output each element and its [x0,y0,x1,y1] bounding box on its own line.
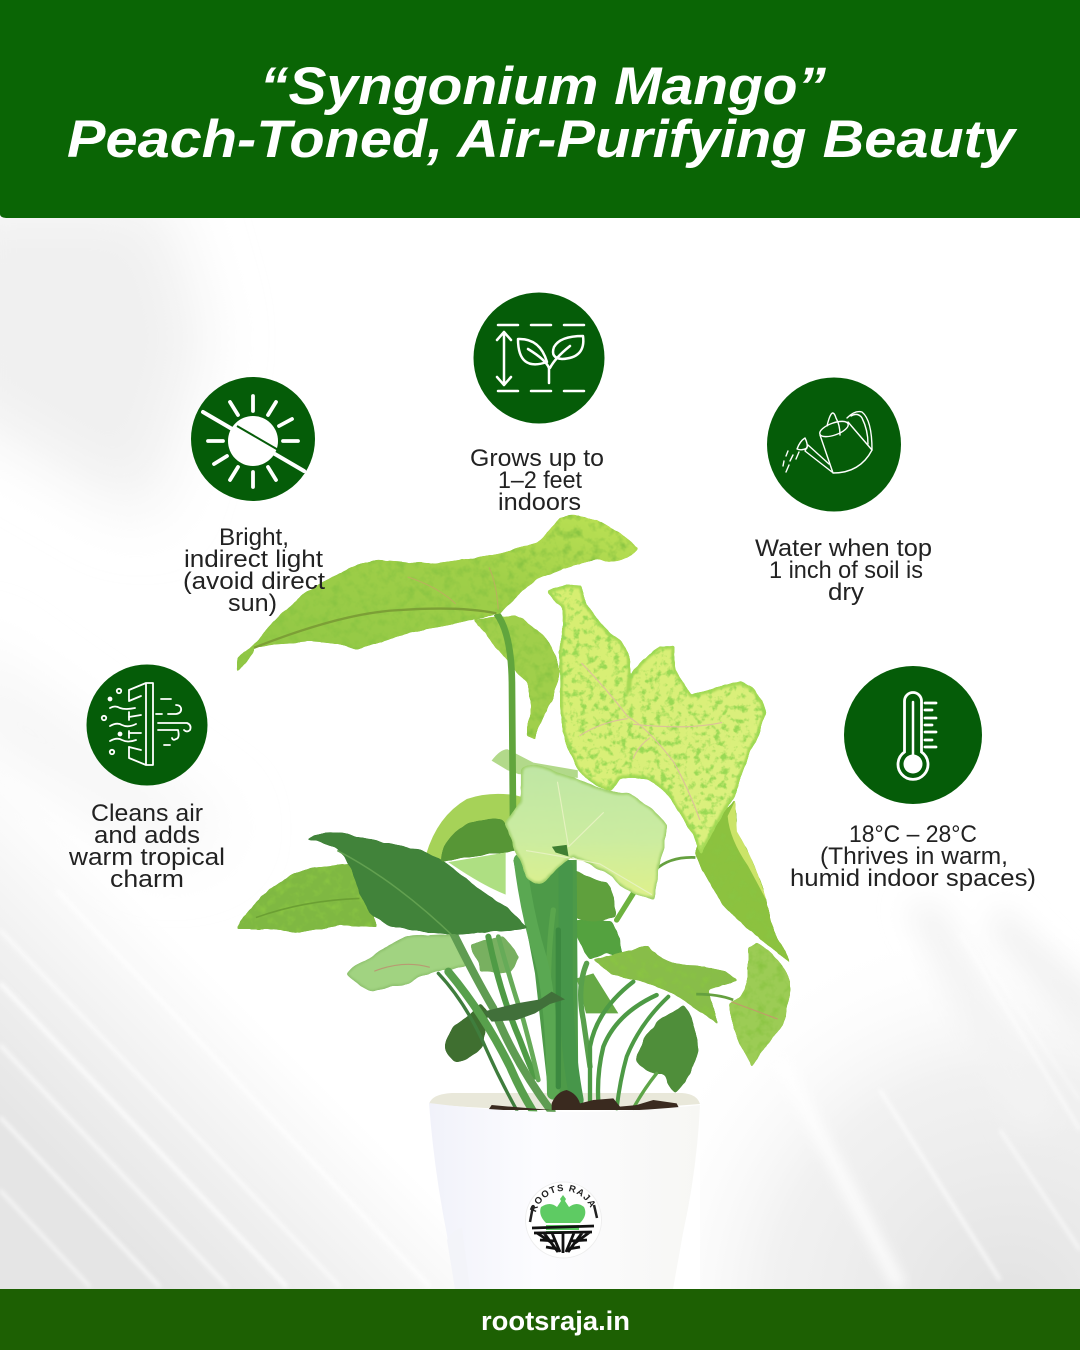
text: temperature [790,821,1036,892]
pot back rim [429,1093,700,1110]
pale low leaf vein [374,964,430,971]
icon: air filter [86,664,208,786]
text: light [183,524,325,617]
stem leaf [483,992,565,1022]
soil [488,1090,680,1110]
text: light: (avoid direct [183,568,325,595]
text: air: and adds [94,822,200,849]
lower right leaf [730,942,791,1067]
callout: temperature [790,666,1036,892]
stem mass [513,860,578,1093]
top leaf veins [254,609,496,648]
icon: plant height [474,292,604,424]
tall stem [496,613,513,828]
text: height: indoors [498,489,581,516]
icon: sun with slash [191,377,315,501]
pale inner piece [448,853,506,895]
lower shaded leaves [520,867,616,927]
dark fold leaf [441,819,517,862]
pale leaf veins [526,782,652,895]
back left leaf [237,864,376,933]
footer url: rootsraja.in [481,1306,630,1336]
crown [540,1195,585,1233]
soft leaf behind stems [470,937,520,973]
text: height [470,445,604,516]
text: light: sun) [228,590,277,617]
stems [438,860,668,1112]
trailing leaf yellow edge [728,801,766,900]
pale front leaf [506,765,666,898]
plant illustration: Syngonium Mango [237,515,795,1112]
bright mottled leaf [549,586,765,853]
pale leaf joint [552,845,569,856]
text: temperature: 18°C – 28°C [849,821,977,848]
text: light: indirect light [184,546,323,573]
text: water: Water when top [755,535,932,562]
connecting stems [656,857,733,1000]
icon: watering can [767,378,901,512]
right trailing leaf [694,799,795,977]
small top pale leaf [492,749,578,778]
callout: height [470,292,604,516]
dark big leaf [306,832,530,935]
text: temperature: (Thrives in warm, [820,843,1008,870]
text: air [68,800,225,893]
text: water [755,535,932,606]
back left leaf vein [256,898,360,918]
dark low leaf right [636,1004,697,1093]
roots [532,1226,594,1253]
text: water: 1 inch of soil is [769,557,923,584]
text: height: Grows up to [470,445,604,472]
logo text: ROOTS RAJA [530,1184,595,1212]
top big leaf [237,515,638,671]
text: water: dry [828,579,864,606]
title [67,57,1018,169]
pot [429,1103,700,1289]
footer band [0,1289,1080,1350]
lower lobe of top leaf [474,615,559,740]
text: air: Cleans air [91,800,203,827]
lower right leaf vein [731,1002,778,1019]
callout: light [183,377,325,617]
text: light: Bright, [219,524,289,551]
icon: thermometer [844,666,982,804]
bright leaf veins [580,663,722,820]
header band [0,0,1080,218]
mid background leaf [426,794,559,862]
pot lower step shading [447,1228,470,1289]
dark leaf vein [337,851,456,939]
small dark low leaf left [444,1003,488,1062]
text: air: warm tropical [68,844,225,871]
text: temperature: humid indoor spaces) [790,865,1036,892]
title: “Syngonium Mango” [260,57,827,116]
title: Peach-Toned, Air-Purifying Beauty [67,110,1018,169]
pale lower left leaf [348,935,467,990]
horizontal leaf [593,946,739,1025]
callout: water [755,378,932,606]
text: height: 1–2 feet [498,467,582,494]
logo badge: Roots Raja [525,1182,602,1258]
callout: air purification [68,664,225,893]
text: air: charm [110,866,184,893]
